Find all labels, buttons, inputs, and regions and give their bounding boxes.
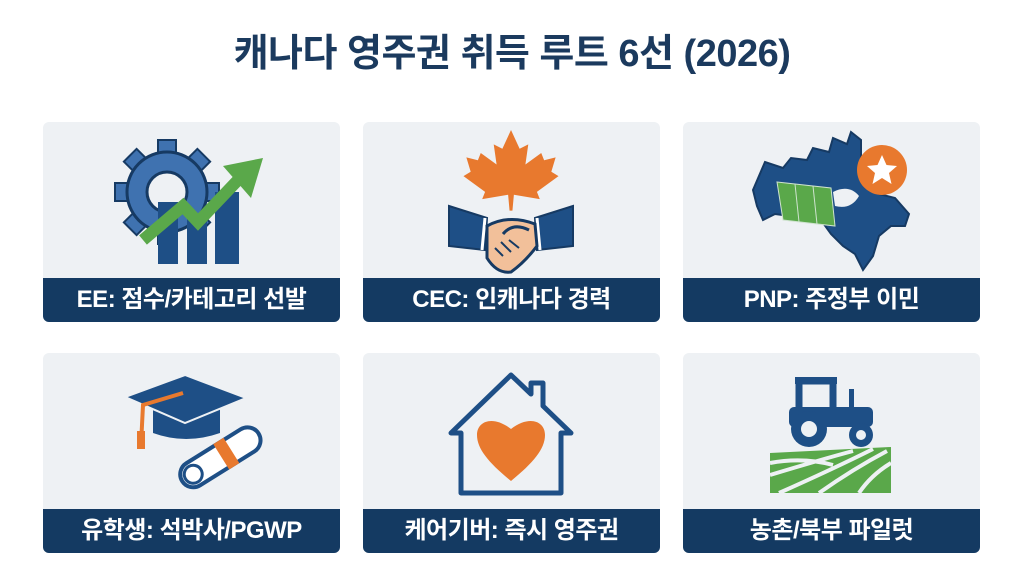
panel: students [43,353,340,553]
label: caregiver [363,509,660,553]
icon: house with heart [448,372,574,496]
label: caregiver: 케어기버: 즉시 영주권 [404,517,619,544]
panel: caregiver [363,353,660,553]
icon: graduation cap and diploma [128,376,263,490]
label: students [43,509,340,553]
label: CEC [363,278,660,322]
panel: CEC [363,122,660,322]
panel: EE [43,122,340,322]
label: PNP: PNP: 주정부 이민 [744,286,919,313]
label: rural [683,509,980,553]
label: students: 유학생: 석박사/PGWP [81,517,302,544]
label: CEC: CEC: 인캐나다 경력 [412,286,611,313]
label: EE [43,278,340,322]
label: rural: 농촌/북부 파일럿 [750,517,913,544]
icon: tractor and fields [770,377,891,493]
title: 캐나다 영주권 취득 루트 6선 (2026) [234,33,790,75]
icon: gear and growth chart [114,139,263,264]
panel: rural/northern [683,353,980,553]
icon: maple leaf and handshake [448,130,574,274]
icon: canada map with star [752,130,910,272]
label: EE: EE: 점수/카테고리 선발 [77,286,306,313]
label: PNP [683,278,980,322]
panel: PNP [683,122,980,322]
